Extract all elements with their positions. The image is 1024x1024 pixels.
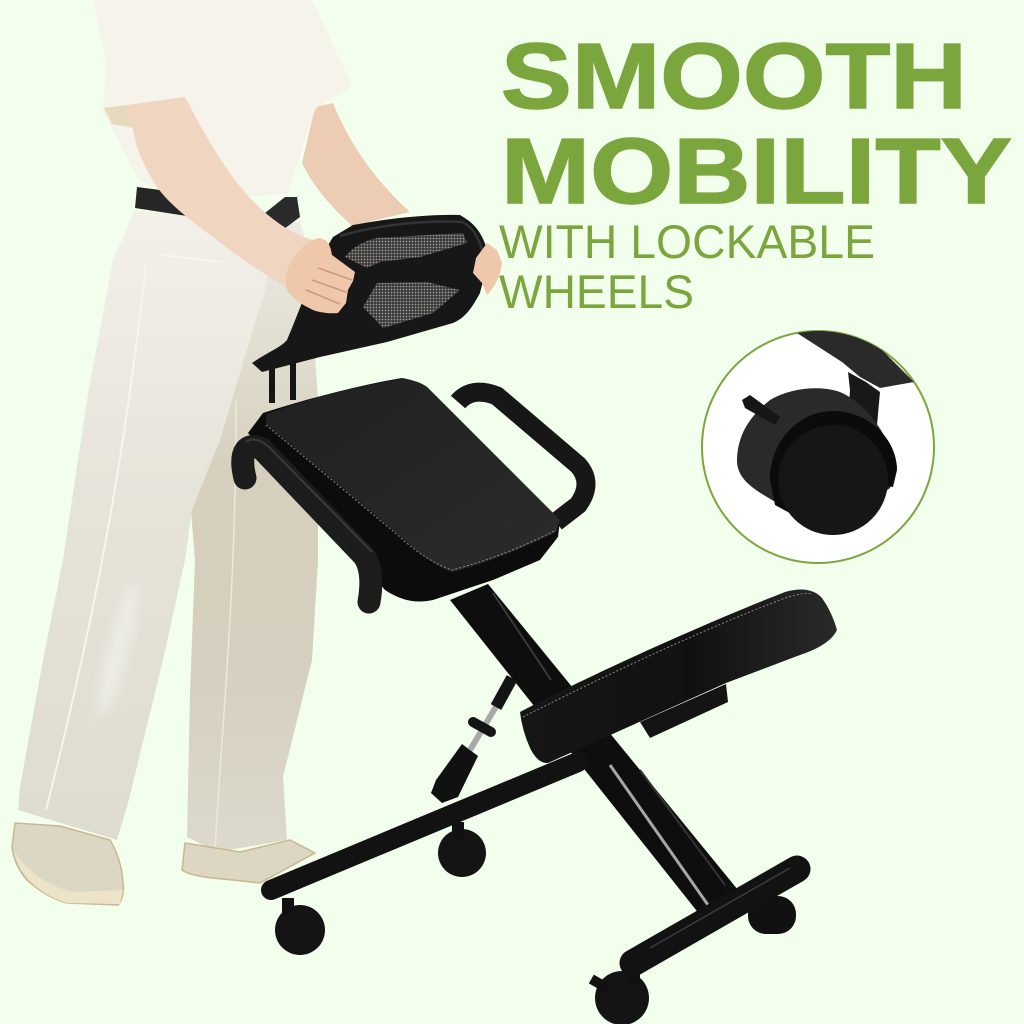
trouser seams xyxy=(46,264,146,810)
trouser highlight xyxy=(92,580,144,720)
knee pad mount xyxy=(640,684,728,738)
column highlights xyxy=(610,765,708,905)
backrest frame highlight xyxy=(340,222,482,250)
far armrest xyxy=(458,392,586,522)
belt xyxy=(135,187,193,217)
title: SMOOTH xyxy=(501,24,967,128)
armrest highlight xyxy=(246,439,372,552)
knee pad stitching xyxy=(523,593,812,717)
title: MOBILITY xyxy=(501,119,1012,223)
person xyxy=(12,0,410,905)
left shoe sole xyxy=(14,850,123,904)
wheel xyxy=(778,425,888,535)
lock tab xyxy=(742,395,780,425)
right shoe xyxy=(182,840,315,883)
right leg xyxy=(187,222,318,852)
near armrest xyxy=(243,447,371,602)
title xyxy=(501,24,1012,223)
gas spring xyxy=(431,678,512,803)
subtitle xyxy=(499,215,875,318)
left shoe xyxy=(12,823,123,905)
caster stem xyxy=(848,372,880,425)
left arm xyxy=(127,97,313,290)
front bar xyxy=(633,869,797,963)
right hand xyxy=(473,243,502,295)
seat cushion xyxy=(248,378,560,602)
subtitle: WHEELS xyxy=(499,265,694,318)
far casters xyxy=(275,822,796,1024)
kneeling chair xyxy=(243,215,837,1024)
shirt xyxy=(93,0,352,196)
left leg xyxy=(18,210,268,840)
left hand xyxy=(286,238,355,313)
main column xyxy=(450,584,738,915)
right arm xyxy=(302,103,410,226)
knee pad xyxy=(520,590,837,763)
subtitle: WITH LOCKABLE xyxy=(499,215,875,268)
chair base in callout xyxy=(797,325,914,388)
lower mesh xyxy=(363,282,460,328)
wheel rim xyxy=(770,411,897,535)
caster housing xyxy=(737,388,897,535)
base arm xyxy=(271,762,578,890)
backrest posts xyxy=(272,360,293,403)
seat top xyxy=(266,379,560,572)
seat stitching xyxy=(266,425,556,570)
callout: caster close-up xyxy=(702,325,934,563)
upper mesh xyxy=(345,233,467,268)
backrest xyxy=(252,215,488,372)
sleeve lining xyxy=(104,105,133,128)
finger gaps xyxy=(306,268,352,304)
